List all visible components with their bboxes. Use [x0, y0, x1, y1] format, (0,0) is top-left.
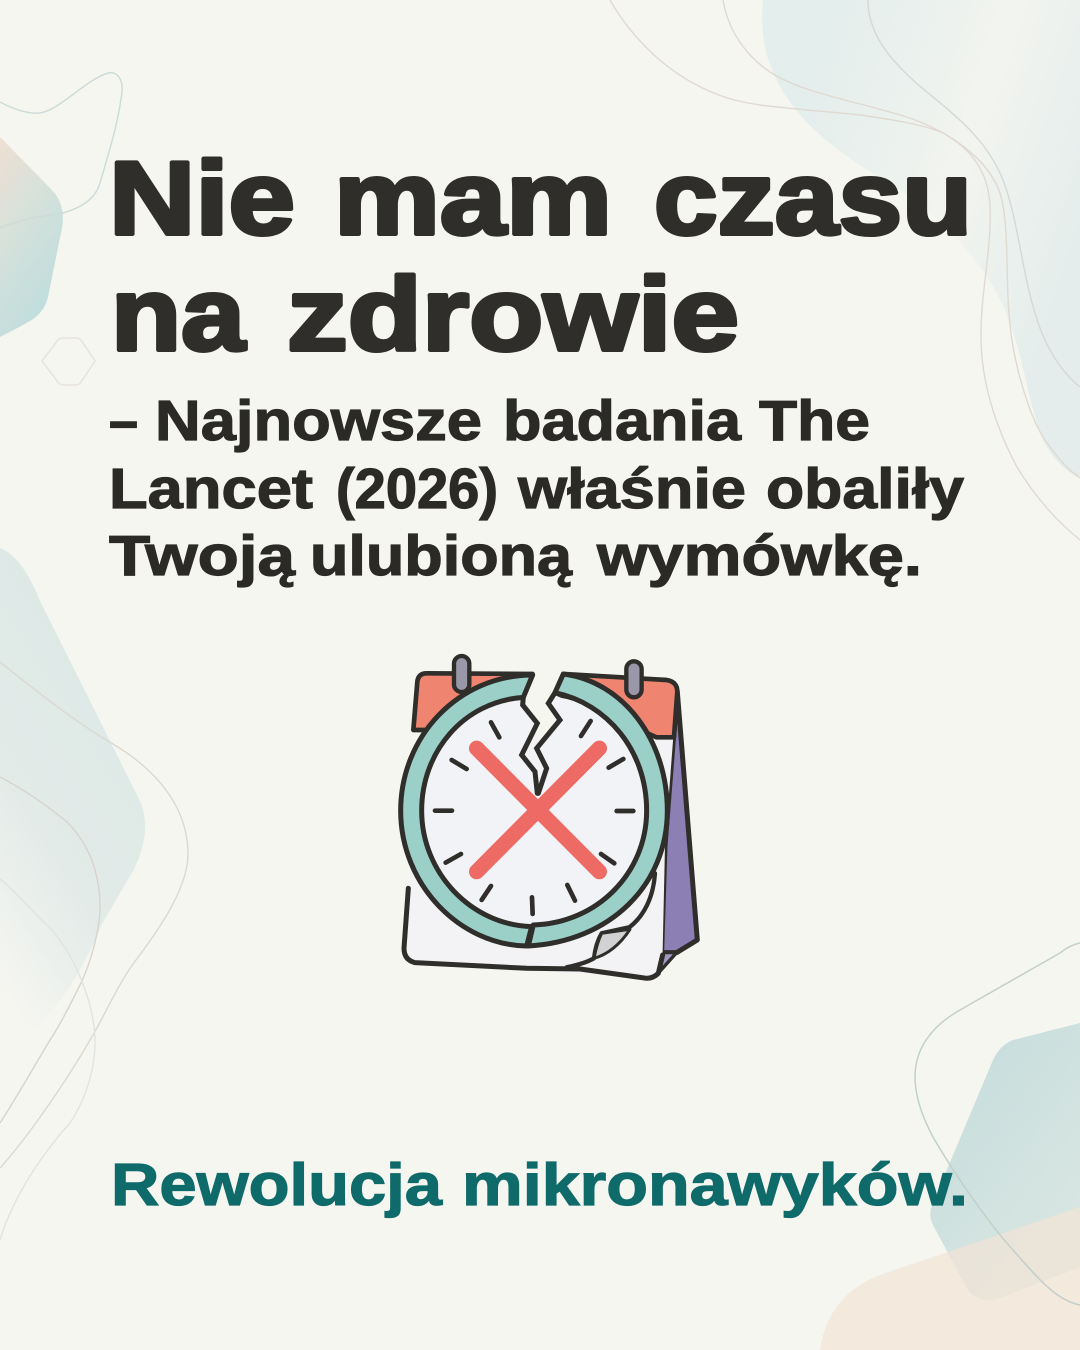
blob: bottom right peach — [820, 1207, 1080, 1350]
calendar back panel — [662, 692, 697, 953]
subtitle: Twoją — [109, 524, 297, 588]
clock ticks — [435, 721, 633, 914]
subtitle: badania — [503, 389, 742, 453]
title: czasu — [654, 141, 972, 257]
panel facet — [657, 953, 677, 975]
outline: hexagon — [42, 338, 95, 385]
subtitle — [109, 389, 964, 588]
subtitle: Lancet — [109, 457, 313, 521]
subtitle: – — [109, 389, 138, 453]
calendar top band: right — [555, 674, 677, 737]
tagline — [111, 1152, 968, 1218]
calendar rings — [454, 656, 642, 697]
subtitle: właśnie — [517, 457, 746, 521]
tagline: Rewolucja — [111, 1152, 443, 1218]
subtitle: The — [759, 389, 870, 453]
outlines: top right — [610, 0, 1080, 540]
calendar page — [404, 733, 673, 978]
outlines: left — [0, 662, 188, 1240]
title: zdrowie — [287, 257, 739, 373]
blob: top left — [0, 137, 63, 337]
outline: top left — [0, 73, 122, 228]
clock face — [422, 697, 647, 925]
outline: bottom right — [915, 943, 1080, 1305]
blob: bottom right teal — [930, 1023, 1080, 1300]
title — [109, 141, 972, 373]
blob: left middle — [0, 548, 145, 1060]
title: na — [111, 257, 246, 373]
tagline: mikronawyków. — [462, 1152, 968, 1218]
subtitle: Najnowsze — [155, 389, 482, 453]
subtitle: ulubioną — [310, 524, 573, 588]
red X — [477, 748, 599, 872]
calendar top band: left — [413, 673, 533, 730]
page curl — [567, 873, 655, 967]
title: mam — [334, 141, 612, 257]
blob: top right — [762, 0, 1080, 478]
subtitle: wymówkę. — [596, 524, 922, 588]
clock ring — [401, 675, 533, 946]
title: Nie — [109, 141, 295, 257]
subtitle: (2026) — [336, 457, 498, 521]
crack — [522, 693, 560, 793]
subtitle: obaliły — [766, 457, 964, 521]
icon: broken clock on calendar — [401, 656, 697, 978]
